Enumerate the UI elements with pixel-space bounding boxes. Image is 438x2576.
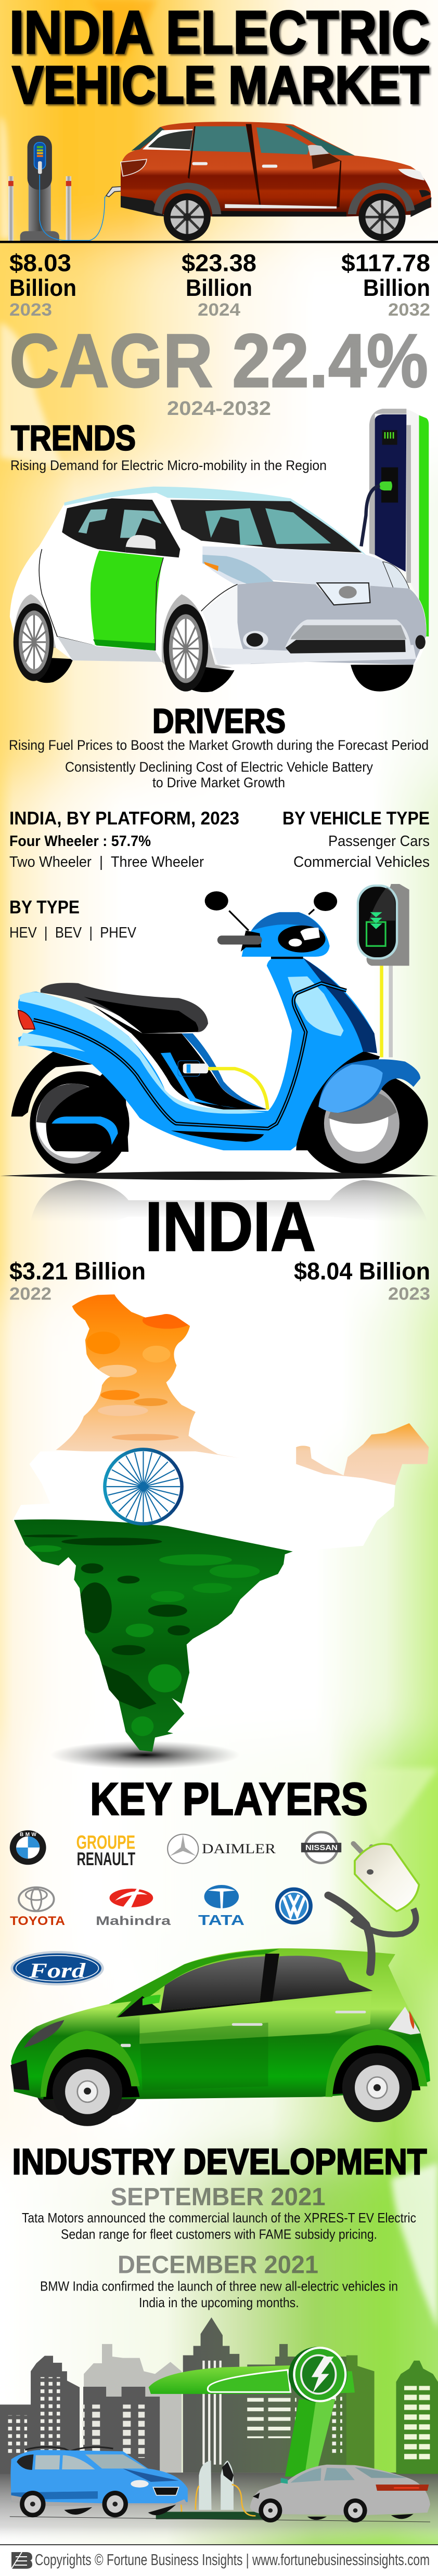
icon: front wheel bbox=[296, 1051, 428, 1176]
scooter reflection bbox=[31, 1180, 428, 1222]
logo text: toyota: TOYOTA bbox=[10, 1914, 65, 1928]
icon: scooter charger bbox=[357, 884, 409, 1057]
september 2021 text: Sedan range for fleet customers with FAME subsidy pricing. bbox=[61, 2226, 377, 2242]
drivers text two: Consistently Declining Cost of Electric Vehicle Battery bbox=[65, 759, 373, 775]
type segment bbox=[9, 897, 137, 941]
stat: india 2023: $8.04 Billion bbox=[294, 1258, 430, 1285]
vehicle type segment bbox=[282, 808, 430, 870]
background buildings bbox=[0, 2318, 438, 2474]
platform segment: INDIA, BY PLATFORM, 2023 bbox=[9, 808, 239, 829]
ground strip bbox=[0, 1172, 438, 1180]
icon: rear wheel bbox=[11, 1052, 130, 1176]
illustration: blue scooter bbox=[0, 884, 438, 1222]
december 2021 text bbox=[40, 2278, 398, 2310]
trends heading: TRENDS bbox=[11, 418, 136, 458]
stat: 2024 market size: 2024 bbox=[198, 300, 240, 320]
logo: tata emblem bbox=[204, 1885, 239, 1908]
logo: toyota emblem bbox=[19, 1888, 54, 1911]
logo: daimler star bbox=[168, 1835, 198, 1864]
illustration: white ev at charger bbox=[10, 409, 429, 692]
title bbox=[9, 0, 430, 114]
map shadow bbox=[50, 1741, 240, 1769]
logo: nissan bbox=[301, 1832, 341, 1863]
logo: ford oval bbox=[10, 1951, 104, 1985]
logo text: daimler: DAIMLER bbox=[202, 1841, 276, 1856]
map white band bbox=[12, 1451, 395, 1552]
stat: 2024 market size: Billion bbox=[186, 275, 252, 301]
logo: mahindra swoosh bbox=[110, 1889, 153, 1907]
drivers text two bbox=[65, 759, 373, 790]
september 2021 heading: SEPTEMBER 2021 bbox=[111, 2183, 326, 2211]
logo text: mahindra: Mahindra bbox=[96, 1914, 171, 1928]
icon: ashoka chakra bbox=[105, 1449, 182, 1524]
september 2021 text bbox=[22, 2210, 416, 2242]
icon: plug and cable bbox=[328, 1843, 419, 1972]
ground line bbox=[0, 241, 438, 243]
icon: charging pillar bbox=[361, 409, 429, 636]
platform segment bbox=[9, 808, 239, 870]
logo text: ford: Ford bbox=[29, 1959, 86, 1982]
stat: 2024 market size bbox=[182, 250, 256, 320]
cagr period: 2024-2032 bbox=[167, 398, 271, 420]
stat: india 2022: 2022 bbox=[9, 1284, 51, 1304]
icon: charge cable bbox=[178, 1061, 267, 1110]
footer bbox=[0, 2544, 438, 2576]
drivers heading: DRIVERS bbox=[152, 701, 286, 740]
stat: india 2023: 2023 bbox=[388, 1284, 430, 1304]
icon: white car bbox=[10, 487, 427, 692]
icon: fortune business insights logo bbox=[11, 2552, 32, 2569]
stat: 2023 market size bbox=[9, 250, 76, 320]
icon: green canopy bbox=[149, 2347, 355, 2477]
icon: green car bbox=[10, 1948, 430, 2126]
stat: 2032 market size bbox=[341, 250, 430, 320]
stat: 2032 market size: 2032 bbox=[388, 300, 430, 320]
type segment: BY TYPE bbox=[9, 897, 80, 917]
map of india in flag colours bbox=[11, 1292, 429, 1769]
icon: charging station bbox=[20, 136, 121, 241]
december 2021 heading: DECEMBER 2021 bbox=[118, 2252, 318, 2279]
stat: 2023 market size: $8.03 bbox=[9, 250, 71, 277]
india heading: INDIA bbox=[145, 1188, 316, 1266]
icon: charger posts bbox=[8, 176, 71, 242]
road bbox=[0, 2473, 438, 2545]
stat: 2032 market size: $117.78 bbox=[341, 250, 430, 277]
december 2021 text: India in the upcoming months. bbox=[139, 2295, 299, 2310]
logo text: renault: RENAULT bbox=[77, 1849, 135, 1869]
icon: blue suv bbox=[10, 2447, 430, 2522]
stat: 2023 market size: Billion bbox=[9, 275, 76, 301]
icon: silver sedan bbox=[250, 2465, 430, 2522]
logo text: tata: TATA bbox=[198, 1912, 244, 1928]
logo: bmw bbox=[10, 1830, 46, 1865]
city scene with charging station bbox=[0, 2318, 438, 2545]
map north-east saffron bbox=[296, 1423, 429, 1485]
logos and green car bbox=[10, 1830, 430, 2126]
icon: scooter body bbox=[18, 958, 420, 1150]
vehicle type segment: Commercial Vehicles bbox=[293, 854, 430, 870]
stat: india 2022: $3.21 Billion bbox=[9, 1258, 146, 1285]
logo text: bmw: B M W bbox=[20, 1832, 37, 1838]
vehicle type segment: Passenger Cars bbox=[328, 833, 430, 850]
key players heading: KEY PLAYERS bbox=[90, 1773, 368, 1825]
drivers text two: to Drive Market Growth bbox=[152, 775, 285, 790]
platform segment: Four Wheeler : 57.7% bbox=[9, 833, 151, 850]
logo text: nissan: NISSAN bbox=[305, 1843, 338, 1852]
platform segment: Two Wheeler | Three Wheeler bbox=[9, 854, 204, 870]
icon: red suv bbox=[121, 122, 432, 241]
logo: volkswagen bbox=[275, 1888, 313, 1924]
stat: 2023 market size: 2023 bbox=[9, 300, 52, 320]
icon: scooter head bbox=[205, 891, 337, 959]
stat: india 2022 bbox=[9, 1258, 146, 1304]
december 2021 text: BMW India confirmed the launch of three new all-electric vehicles in bbox=[40, 2278, 398, 2294]
logo text: renault bbox=[76, 1832, 135, 1869]
logo text: renault: GROUPE bbox=[76, 1832, 135, 1853]
map saffron band bbox=[53, 1292, 249, 1461]
illustration: charging station and red suv bbox=[8, 122, 432, 242]
stat: 2032 market size: Billion bbox=[363, 275, 430, 301]
stat: 2024 market size: $23.38 bbox=[182, 250, 256, 277]
map green band bbox=[11, 1518, 296, 1754]
stat: india 2023 bbox=[294, 1258, 430, 1304]
trends text: Rising Demand for Electric Micro-mobility in the Region bbox=[10, 458, 327, 473]
icon: charging pumps bbox=[156, 2461, 263, 2519]
type segment: HEV | BEV | PHEV bbox=[9, 925, 137, 941]
